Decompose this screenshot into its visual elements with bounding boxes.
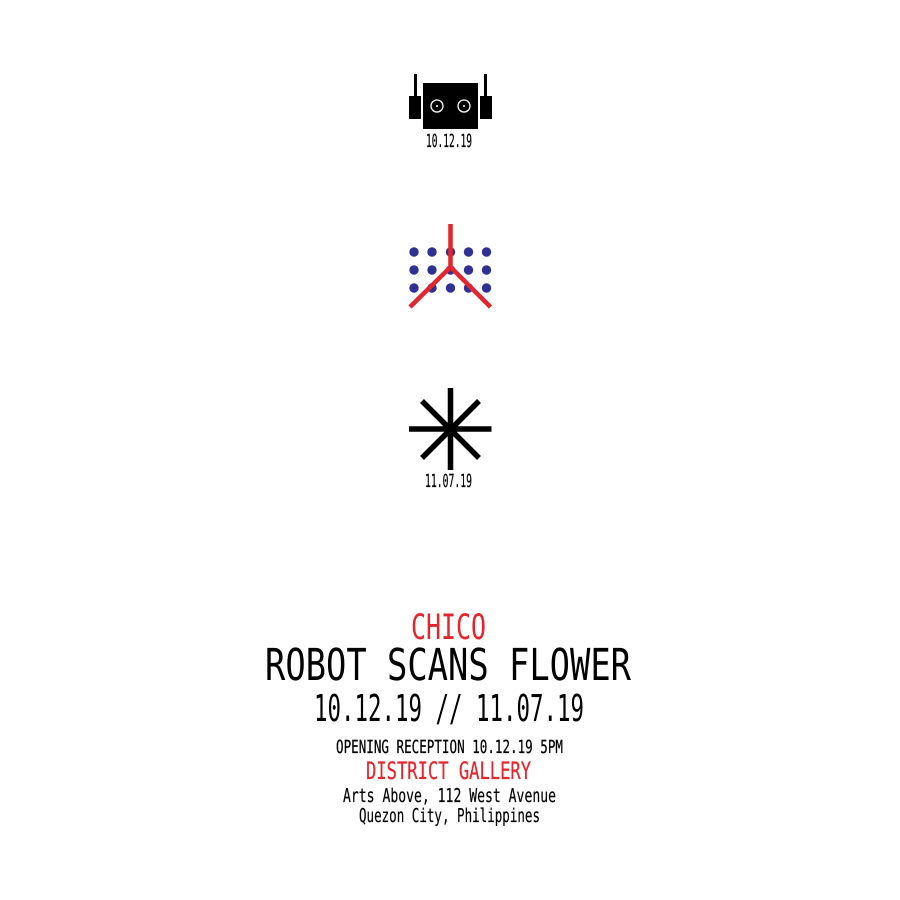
exhibition dates: 10.12.19 // 11.07.19 xyxy=(314,687,584,730)
icon: asterisk flower xyxy=(409,388,492,470)
dot grid xyxy=(409,247,491,293)
icon: dot grid with red branching lines xyxy=(409,224,491,307)
address line 2: Quezon City, Philippines xyxy=(359,805,540,827)
address line 1: Arts Above, 112 West Avenue xyxy=(343,785,556,807)
exhibition title: ROBOT SCANS FLOWER xyxy=(265,640,631,691)
artist name: CHICO xyxy=(411,608,486,648)
icon: robot head xyxy=(409,74,492,129)
date: opening: 10.12.19 xyxy=(426,131,472,152)
gallery name: DISTRICT GALLERY xyxy=(366,757,531,785)
red branching lines xyxy=(410,224,490,307)
opening reception: OPENING RECEPTION 10.12.19 5PM xyxy=(336,737,563,758)
date: closing: 11.07.19 xyxy=(425,471,472,492)
